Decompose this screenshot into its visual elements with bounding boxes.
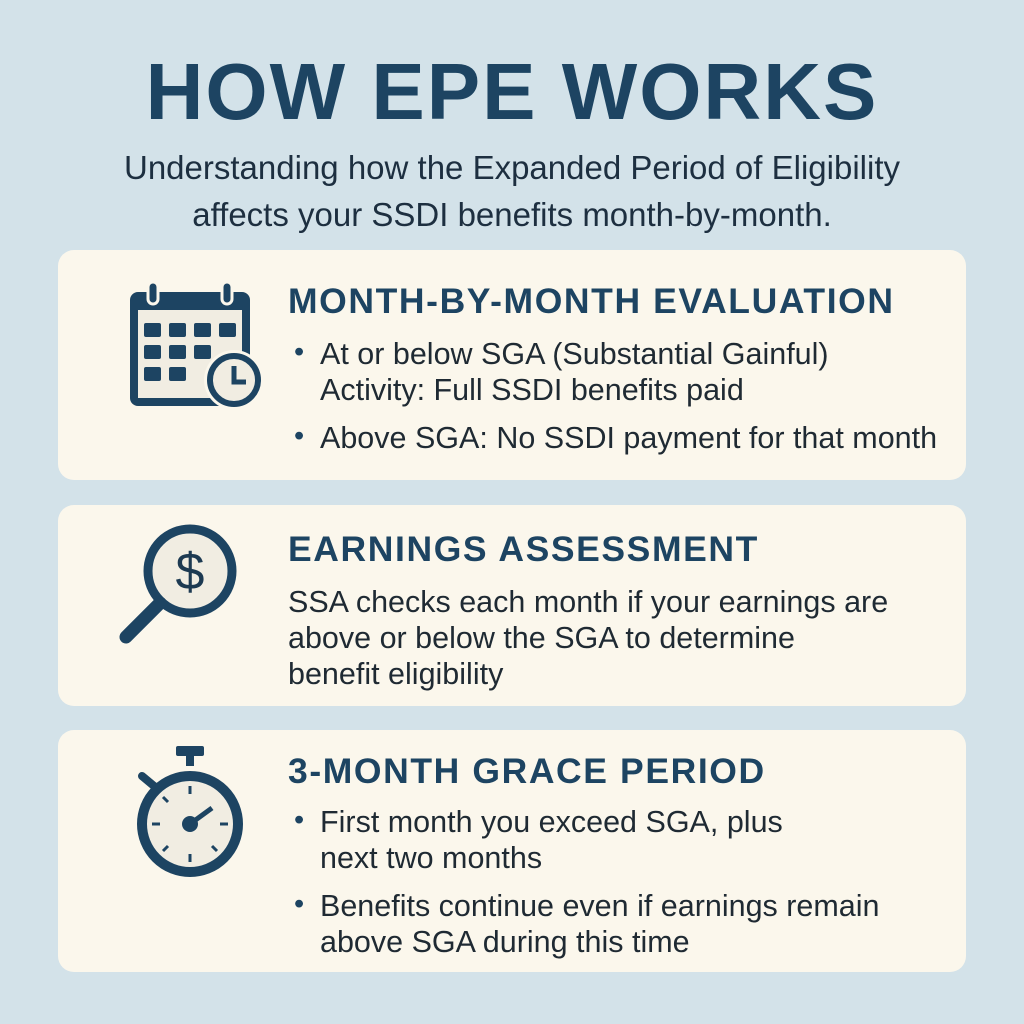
bullet list: • — [294, 888, 304, 920]
icon: stopwatch — [137, 746, 243, 877]
panel: grace period — [58, 730, 966, 972]
text block: SSA checks each month if your earnings are — [288, 585, 888, 619]
icon: calendar with clock — [130, 284, 261, 407]
subtitle: Understanding how the Expanded Period of Eligibility — [124, 149, 900, 186]
bullet list: • — [294, 804, 304, 836]
bullet list: First month you exceed SGA, plus — [320, 805, 783, 839]
text block: benefit eligibility — [288, 657, 503, 691]
panel: month-by-month evaluation — [58, 250, 966, 480]
subtitle: affects your SSDI benefits month-by-month. — [192, 196, 832, 233]
title: HOW EPE WORKS — [146, 47, 878, 136]
bullet list — [294, 804, 880, 959]
bullet list: At or below SGA (Substantial Gainful) — [320, 337, 829, 371]
bullet list: Benefits continue even if earnings remain — [320, 889, 880, 923]
heading: MONTH-BY-MONTH EVALUATION — [288, 281, 895, 321]
heading: EARNINGS ASSESSMENT — [288, 529, 759, 569]
bullet list: Above SGA: No SSDI payment for that month — [320, 421, 937, 455]
bullet list: • — [294, 420, 304, 452]
icon: magnifier with dollar — [120, 524, 236, 644]
bullet list — [294, 336, 937, 455]
subtitle — [124, 149, 900, 233]
icon: magnifier with dollar: $ — [176, 543, 205, 601]
bullet list: Activity: Full SSDI benefits paid — [320, 373, 744, 407]
panel: earnings assessment — [58, 505, 966, 706]
bullet list: • — [294, 336, 304, 368]
heading: 3-MONTH GRACE PERIOD — [288, 751, 766, 791]
bullet list: above SGA during this time — [320, 925, 690, 959]
bullet list: next two months — [320, 841, 542, 875]
text block: above or below the SGA to determine — [288, 621, 795, 655]
text block — [288, 585, 888, 691]
